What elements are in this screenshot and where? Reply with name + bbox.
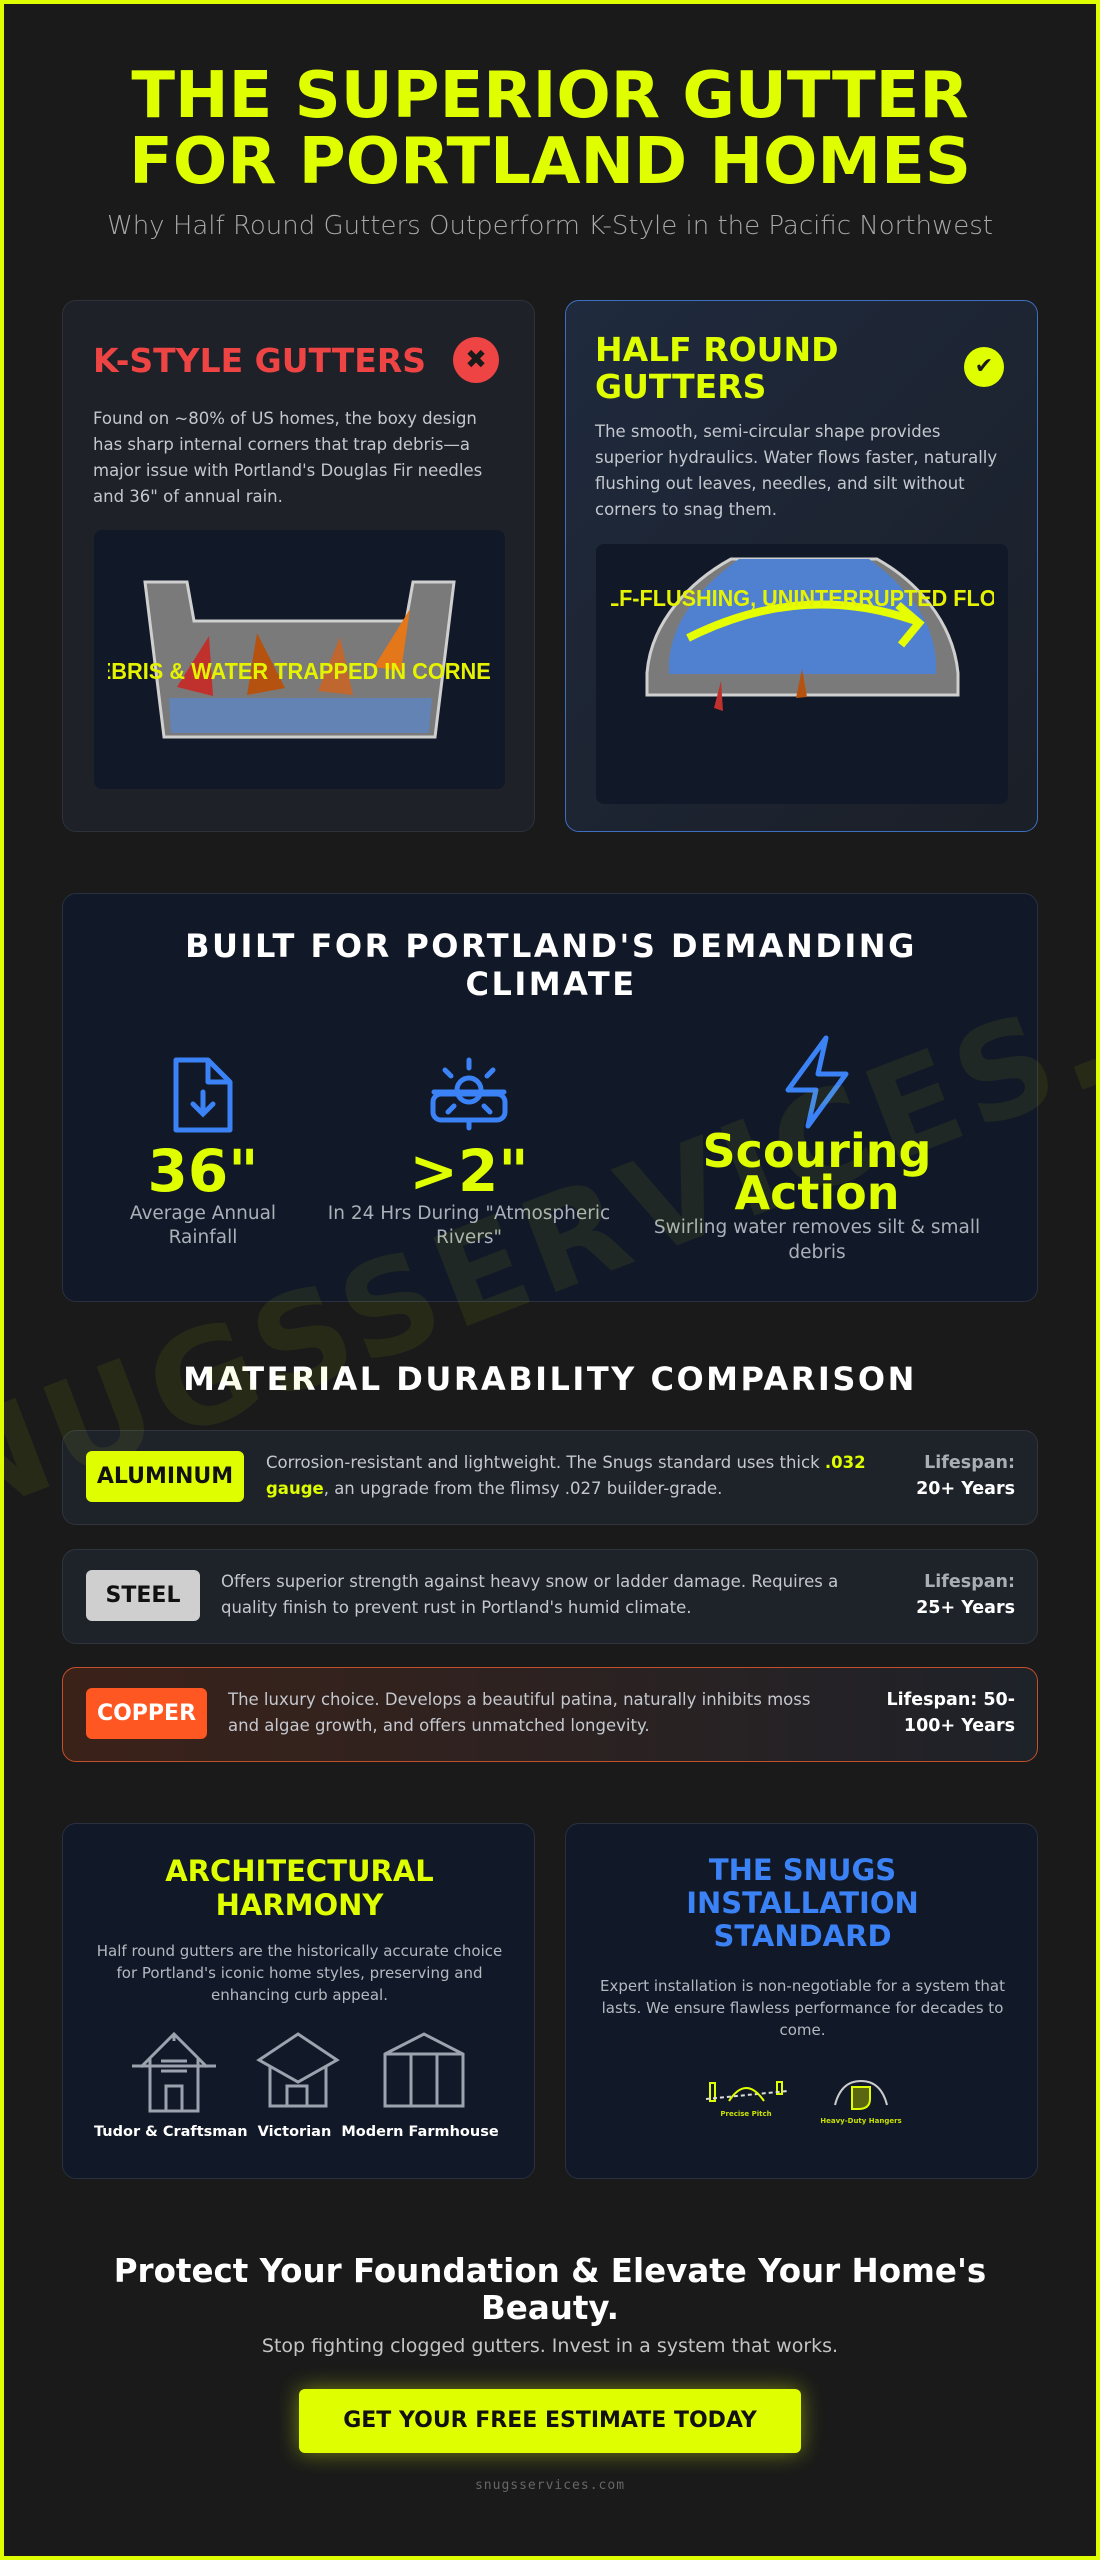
lifespan: copper: 100+ Years: [904, 1716, 1015, 1736]
stat: rainfall: Rainfall: [169, 1227, 237, 1248]
icon: tudor house: [132, 2032, 216, 2112]
badge: steel: STEEL: [106, 1583, 180, 1608]
subtitle: Why Half Round Gutters Outperform K-Style in the Pacific Northwest: [107, 211, 993, 241]
icon: bolt: [786, 1036, 848, 1128]
stat: scouring action: [654, 1036, 980, 1263]
lifespan: steel: [916, 1572, 1015, 1618]
button: free estimate: GET YOUR FREE ESTIMATE TODAY: [343, 2408, 757, 2433]
text: aluminum: Corrosion-resistant and lightweight. The Snugs standard uses thick .032 gauge, an upgrade from the flimsy .027 builder-grade.: [266, 1453, 866, 1498]
badge: aluminum: ALUMINUM: [97, 1464, 233, 1489]
text: k-style description: Found on ~80% of US homes, the boxy design has sharp internal corners that trap debris—a major issue with Portland's Douglas Fir needles and 36" of annual rain.: [93, 409, 482, 506]
icon: modern farmhouse: [384, 2032, 464, 2108]
title: [129, 59, 971, 199]
diagram: self flushing: [596, 544, 1008, 804]
labels: house styles: Tudor & Craftsman Victorian Modern Farmhouse: [94, 2124, 499, 2140]
text: steel: Offers superior strength against heavy snow or ladder damage. Requires a quality finish to prevent rust in Portland's humid climate.: [221, 1572, 838, 1617]
icon: heavy-duty hangers: [821, 2080, 902, 2125]
icon: heavy-duty hangers: Heavy-Duty Hangers: [821, 2117, 902, 2125]
heading: material durability: MATERIAL DURABILITY COMPARISON: [183, 1360, 917, 1398]
heading: installation standard: THE SNUGS: [709, 1853, 896, 1887]
text: installation: Expert installation is non-negotiable for a system that lasts. We ensure flawless performance for decades to come.: [600, 1977, 1005, 2039]
stat: atmospheric rivers: >2": [409, 1137, 529, 1205]
stat: atmospheric rivers: In 24 Hrs During "Atmospheric: [328, 1203, 610, 1224]
stat: scouring action: Scouring: [703, 1124, 931, 1178]
row: steel: [62, 1549, 1038, 1644]
lifespan: copper: Lifespan: 50-: [886, 1690, 1015, 1710]
badge: copper: [86, 1688, 207, 1739]
heading: climate: BUILT FOR PORTLAND'S DEMANDING: [185, 927, 917, 965]
icon: check circle: [964, 347, 1004, 387]
heading: architectural harmony: ARCHITECTURAL: [165, 1854, 434, 1888]
icon: x circle: ✖: [465, 345, 487, 375]
stat: scouring action: debris: [788, 1242, 846, 1263]
heading: climate: [185, 927, 917, 1003]
cta subtext: Stop fighting clogged gutters. Invest in a system that works.: [262, 2335, 838, 2357]
lifespan: copper: [886, 1690, 1015, 1736]
lifespan: steel: Lifespan:: [924, 1572, 1015, 1592]
panel: snugs installation standard: [565, 1823, 1038, 2179]
stat: atmospheric rivers: [328, 1058, 610, 1248]
badge: aluminum: [86, 1451, 244, 1502]
heading: installation standard: [686, 1853, 919, 1953]
icon: victorian house: [256, 2032, 340, 2108]
stat: rainfall: Average Annual: [130, 1203, 276, 1224]
heading: installation standard: INSTALLATION: [686, 1886, 919, 1920]
icon: precise pitch: Precise Pitch: [720, 2110, 772, 2118]
title: THE SUPERIOR GUTTER: [131, 59, 969, 133]
heading: climate: CLIMATE: [465, 965, 637, 1003]
stat: scouring action: Swirling water removes silt & small: [654, 1217, 980, 1238]
cta heading: [114, 2252, 986, 2327]
cta heading: Protect Your Foundation & Elevate Your Home's: [114, 2252, 986, 2290]
stat: atmospheric rivers: Rivers": [436, 1227, 502, 1248]
footer url: snugsservices.com: [475, 2478, 625, 2493]
diagram: k-style debris: [94, 530, 505, 789]
stat: rainfall: 36": [148, 1137, 258, 1205]
heading: half round: HALF ROUND: [595, 330, 838, 369]
panel: k-style gutters: [62, 300, 535, 832]
lifespan: aluminum: [916, 1453, 1015, 1499]
heading: half round: GUTTERS: [595, 367, 766, 406]
title: FOR PORTLAND HOMES: [129, 125, 971, 199]
lifespan: aluminum: 20+ Years: [916, 1479, 1015, 1499]
heading: k-style: K-STYLE GUTTERS: [93, 341, 426, 380]
heading: installation standard: STANDARD: [713, 1919, 892, 1953]
heading: architectural harmony: HARMONY: [216, 1888, 383, 1922]
lifespan: steel: 25+ Years: [916, 1598, 1015, 1618]
heading: architectural harmony: [165, 1854, 434, 1922]
row: aluminum: [62, 1430, 1038, 1525]
icon: check circle: ✔: [975, 354, 993, 379]
badge: copper: COPPER: [97, 1701, 196, 1726]
panel: architectural harmony: [62, 1823, 535, 2179]
badge: steel: [86, 1570, 200, 1621]
icon: sunrise: [430, 1058, 508, 1130]
text: copper: The luxury choice. Develops a beautiful patina, naturally inhibits moss and algae growth, and offers unmatched longevity.: [228, 1690, 810, 1735]
text: harmony: Half round gutters are the historically accurate choice for Portland's iconic home styles, preserving and enhancing curb appeal.: [97, 1942, 502, 2004]
stat: rainfall: [130, 1058, 276, 1248]
panel: half round gutters: [565, 300, 1038, 832]
lifespan: aluminum: Lifespan:: [924, 1453, 1015, 1473]
icon: precise pitch: [706, 2081, 787, 2118]
icon: x circle: [453, 337, 499, 383]
row: copper: [62, 1667, 1038, 1762]
stat: scouring action: Action: [734, 1166, 899, 1220]
heading: half round: [595, 330, 838, 406]
text: half round description: The smooth, semi-circular shape provides superior hydraulics. Water flows faster, naturally flushing out leaves, needles, and silt without corners to snag them.: [595, 422, 997, 519]
cta heading: Beauty.: [481, 2289, 619, 2327]
icon: file download: [174, 1058, 232, 1132]
panel: climate: [62, 893, 1038, 1302]
button: free estimate: [299, 2389, 801, 2453]
